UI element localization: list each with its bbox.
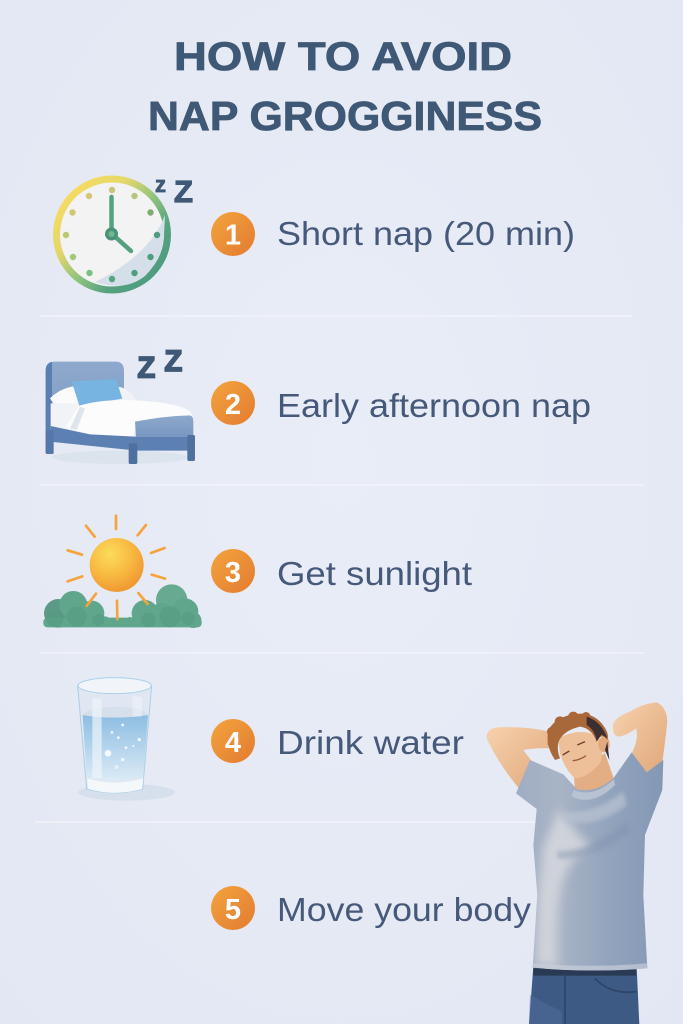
badge 5 — [211, 886, 255, 930]
title — [148, 35, 542, 139]
person stretching — [487, 702, 667, 1024]
icon: sun over bushes — [43, 516, 202, 628]
icon text: z z: Z — [164, 345, 182, 378]
icon: glass of water — [78, 678, 175, 801]
badge 4 — [211, 719, 255, 763]
icon text: z z — [155, 172, 193, 209]
step 4 label: Drink water — [277, 724, 464, 761]
step 3 label: Get sunlight — [277, 555, 472, 592]
head — [558, 732, 602, 778]
title: NAP GROGGINESS — [148, 93, 542, 139]
left arm — [487, 727, 552, 792]
jeans — [529, 967, 639, 1024]
icon text: z z — [137, 345, 182, 384]
badge 1: 1 — [225, 220, 241, 252]
badge 3: 3 — [225, 557, 241, 589]
badge 5: 5 — [225, 894, 241, 926]
step 5 label: Move your body — [277, 891, 532, 928]
badge 1 — [211, 212, 255, 256]
icon: clock with zzz — [53, 172, 193, 294]
t-shirt — [516, 752, 663, 971]
badge 4: 4 — [225, 727, 241, 759]
right arm — [613, 702, 667, 775]
icon: bed with zzz — [46, 345, 195, 464]
icon text: z z: z — [155, 172, 166, 197]
icon text: z z: Z — [174, 174, 193, 209]
hair — [547, 712, 609, 760]
step 1 label: Short nap (20 min) — [277, 215, 575, 252]
badge 2: 2 — [225, 389, 241, 421]
badge 3 — [211, 549, 255, 593]
neck — [573, 753, 614, 795]
step 2 label: Early afternoon nap — [277, 387, 591, 424]
title: HOW TO AVOID — [174, 35, 512, 79]
icon text: z z: Z — [137, 351, 155, 384]
badge 2 — [211, 381, 255, 425]
